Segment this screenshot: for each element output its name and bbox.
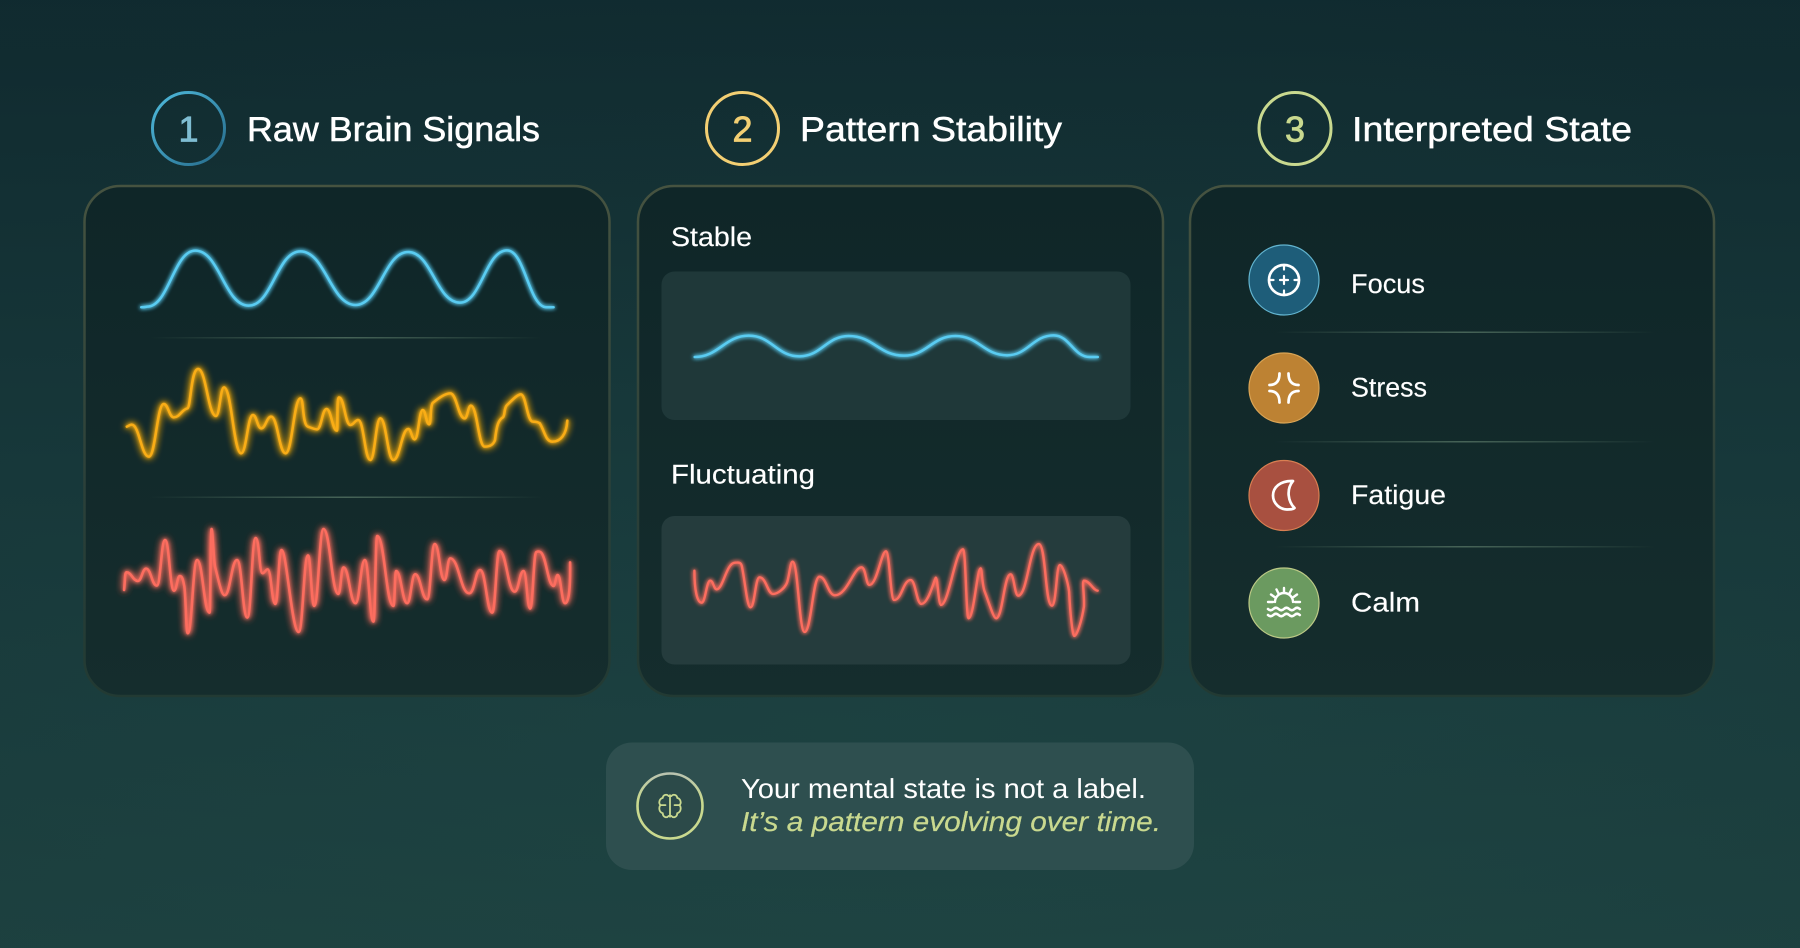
state: Calm	[1249, 568, 1420, 638]
label: Calm	[1351, 588, 1420, 618]
step number 3 badge: 3	[1285, 108, 1305, 150]
label: Focus	[1351, 269, 1425, 299]
chart: stable wave	[695, 335, 1098, 357]
column heading 2: Pattern Stability	[706, 92, 1063, 164]
message text: It’s a pattern evolving over time.	[741, 806, 1161, 837]
message text: Your mental state is not a label.	[741, 773, 1146, 804]
step number 2 badge	[706, 92, 778, 164]
icon: brain	[638, 774, 702, 838]
panel: pattern stability	[638, 186, 1163, 696]
message text	[741, 773, 1161, 837]
chart: blue wave	[141, 250, 554, 307]
step number 1 badge: 1	[178, 108, 199, 150]
heading text: Pattern Stability	[800, 111, 1063, 149]
chart: red wave	[124, 529, 570, 633]
icon: sun over water	[1249, 568, 1319, 638]
stable signal box	[662, 272, 1130, 420]
icon: inward burst	[1249, 353, 1319, 423]
heading text: Interpreted State	[1352, 111, 1632, 149]
label: Stable: Stable	[671, 222, 752, 252]
step number 2 badge: 2	[732, 108, 753, 150]
chart: amber wave	[127, 369, 567, 460]
icon: moon	[1249, 460, 1319, 530]
chart: fluctuating wave	[694, 544, 1098, 636]
state: Focus	[1249, 245, 1425, 315]
step number 3 badge	[1259, 92, 1331, 164]
label: Fatigue	[1351, 480, 1446, 510]
callout: closing message	[606, 742, 1194, 870]
label: Fluctuating: Fluctuating	[671, 460, 815, 490]
step number 1 badge	[152, 92, 224, 164]
icon: crosshair	[1249, 245, 1319, 315]
panel: raw brain signals	[84, 186, 610, 696]
label: Stress	[1351, 372, 1427, 402]
column heading 1: Raw Brain Signals	[152, 92, 540, 164]
column heading 3: Interpreted State	[1259, 92, 1632, 164]
heading text: Raw Brain Signals	[247, 111, 540, 149]
state: Fatigue	[1249, 460, 1446, 530]
fluctuating signal box	[662, 516, 1130, 664]
panel: interpreted state	[1190, 186, 1714, 696]
state: Stress	[1249, 353, 1427, 423]
